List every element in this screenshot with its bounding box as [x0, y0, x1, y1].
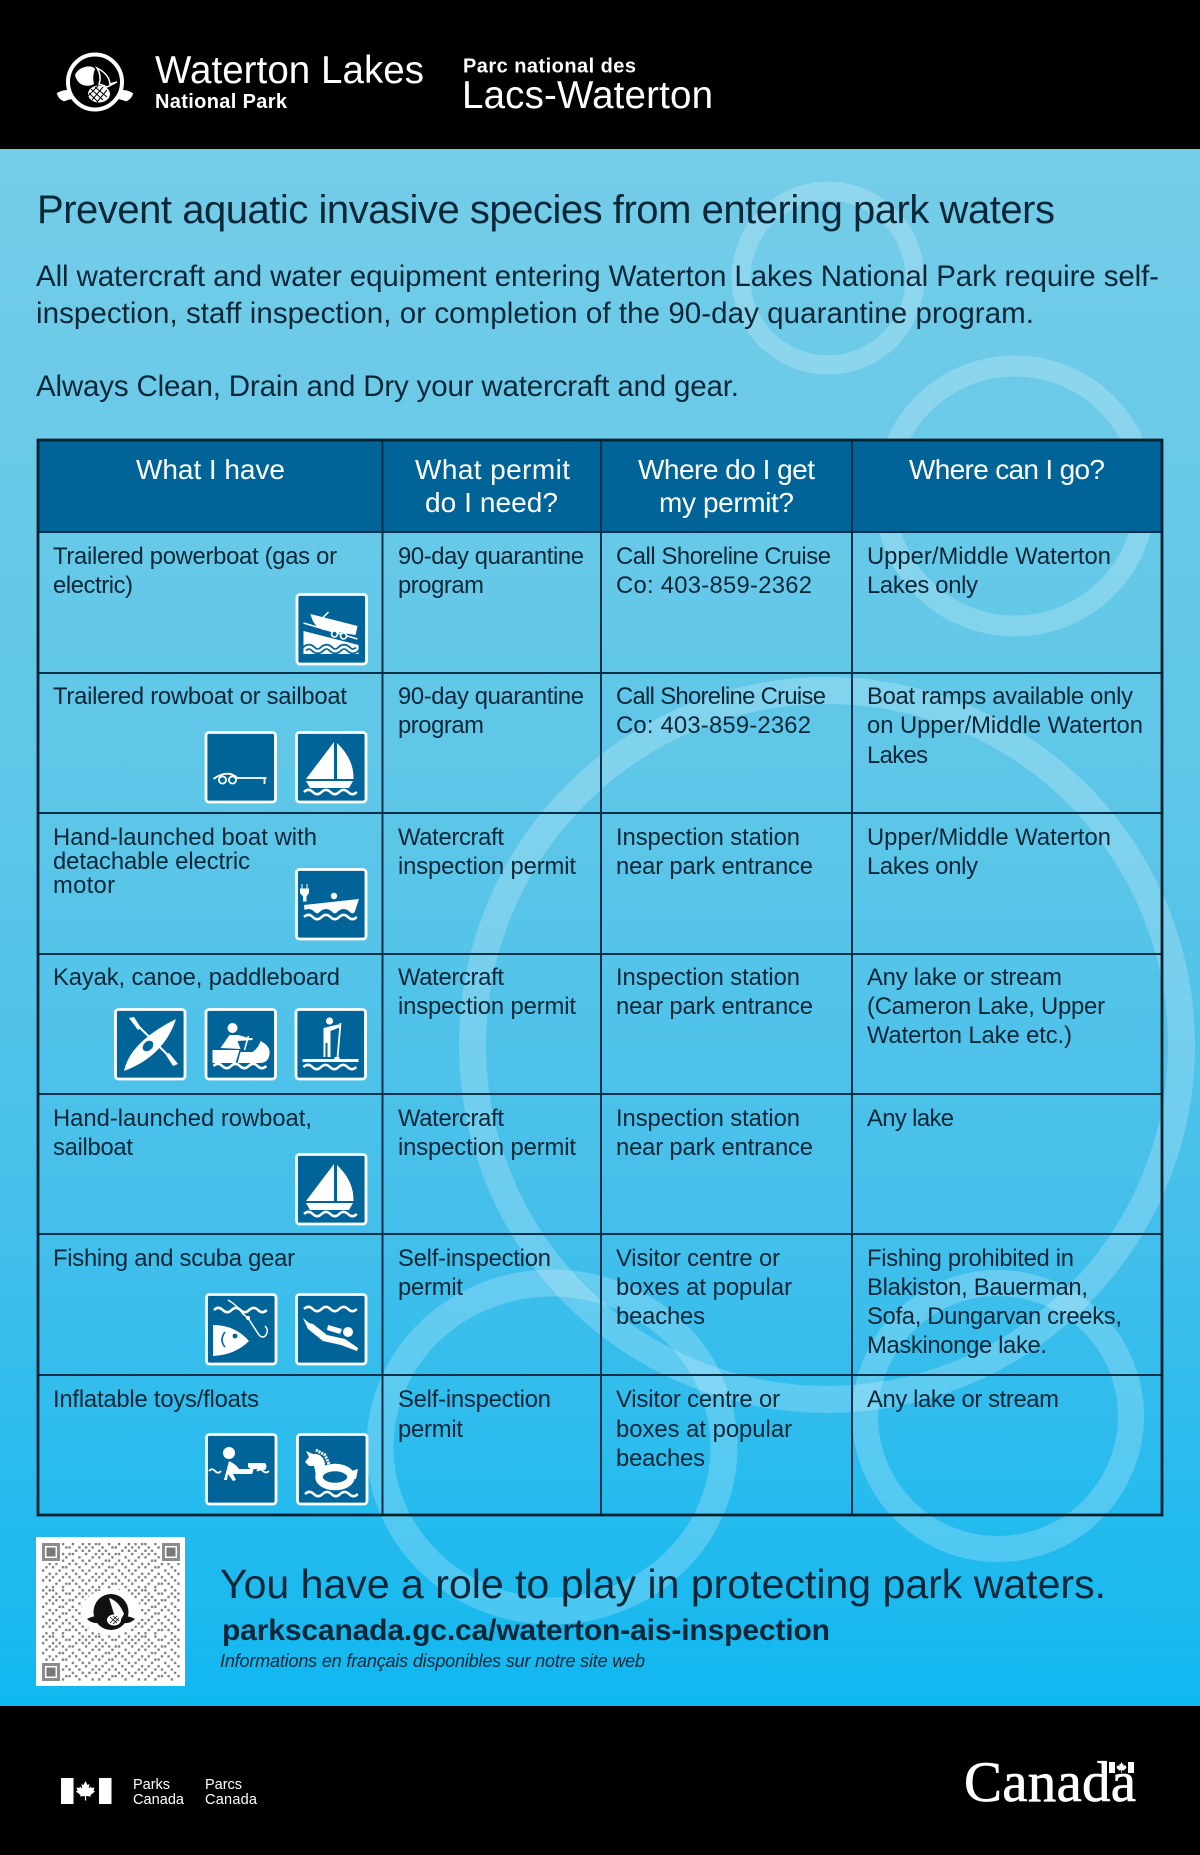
text: Any lake — [867, 1105, 954, 1132]
icon: sailboat — [296, 1154, 366, 1224]
header: what I have: What I have — [136, 454, 285, 485]
decorative water rings — [380, 191, 1182, 1611]
text: Sofa, Dungarvan creeks, — [867, 1303, 1122, 1330]
text: inspection permit — [398, 993, 576, 1020]
icon: canoe — [206, 1010, 276, 1079]
header: what permit — [415, 454, 570, 518]
icon: beaver logo — [56, 54, 134, 110]
text — [616, 683, 826, 739]
text — [867, 824, 1111, 880]
cell text: motor — [53, 872, 115, 899]
text: boxes at popular — [616, 1274, 792, 1301]
text — [398, 1386, 551, 1443]
text: beaches — [616, 1303, 705, 1330]
icon: kayak — [116, 1010, 185, 1079]
cell text: Inflatable toys/floats — [53, 1386, 259, 1413]
table — [38, 440, 1162, 1515]
park name french: Parc national des — [463, 56, 636, 78]
icon: flag over final a — [1109, 1762, 1134, 1773]
row: fishing and scuba gear — [53, 1245, 1122, 1364]
parks canada wordmark: Parks — [133, 1777, 170, 1793]
text: Inspection station — [616, 964, 800, 991]
text: Lakes only — [867, 853, 978, 880]
call to action: You have a role to play in protecting park waters. — [220, 1561, 1106, 1607]
text — [867, 1245, 1122, 1359]
text: Self-inspection — [398, 1386, 551, 1413]
header: what permit: do I need? — [425, 487, 558, 518]
table header row — [38, 440, 1162, 532]
parks canada wordmark: Canada — [133, 1792, 185, 1808]
french note: Informations en français disponibles sur notre site web — [220, 1651, 645, 1671]
text: permit — [398, 1416, 463, 1443]
cell text — [53, 543, 337, 599]
text: Inspection station — [616, 1105, 800, 1132]
text: Call Shoreline Cruise — [616, 683, 826, 710]
row: kayak canoe paddleboard — [53, 964, 1105, 1079]
park name english: National Park — [155, 91, 288, 113]
text: near park entrance — [616, 853, 813, 880]
row: trailered rowboat or sailboat — [53, 683, 1143, 802]
text: 90-day quarantine — [398, 683, 584, 710]
text: on Upper/Middle Waterton — [867, 712, 1143, 739]
park name french — [462, 56, 713, 117]
text: Lakes only — [867, 572, 978, 599]
footer band — [0, 1706, 1200, 1855]
text: Upper/Middle Waterton — [867, 824, 1111, 851]
cell text: sailboat — [53, 1134, 133, 1161]
intro text: All watercraft and water equipment entering Waterton Lakes National Park require self- — [36, 260, 1159, 293]
header: where do I get: my permit? — [659, 487, 794, 518]
text: Co: 403-859-2362 — [616, 712, 811, 739]
parcs canada wordmark — [205, 1777, 258, 1808]
cell text: Kayak, canoe, paddleboard — [53, 964, 340, 991]
text: Visitor centre or — [616, 1245, 780, 1272]
text — [867, 964, 1105, 1049]
text — [616, 1105, 813, 1161]
icon: QR beaver logo — [87, 1594, 135, 1630]
text — [398, 824, 576, 880]
text — [867, 543, 1111, 599]
text: Upper/Middle Waterton — [867, 543, 1111, 570]
text: beaches — [616, 1445, 705, 1472]
QR code — [36, 1537, 185, 1686]
icon: person on float — [206, 1434, 276, 1504]
cell text: Hand-launched boat with — [53, 824, 317, 851]
icon: electric motor boat — [296, 870, 366, 939]
text: Self-inspection — [398, 1245, 551, 1272]
text — [616, 824, 813, 880]
text: Watercraft — [398, 824, 504, 851]
text: program — [398, 712, 484, 739]
header: what permit: What permit — [415, 454, 570, 485]
text: inspection permit — [398, 1134, 576, 1161]
header: where can I go: Where can I go? — [909, 454, 1105, 485]
text: (Cameron Lake, Upper — [867, 993, 1105, 1020]
icon: trailer — [206, 732, 276, 802]
park name english — [155, 49, 424, 113]
cell text: Hand-launched rowboat, — [53, 1105, 312, 1132]
text — [398, 683, 584, 739]
text: Maskinonge lake. — [867, 1332, 1047, 1359]
text: Co: 403-859-2362 — [616, 572, 812, 599]
text: Waterton Lake etc.) — [867, 1022, 1072, 1049]
text — [398, 1105, 576, 1161]
icon: scuba diver — [296, 1294, 366, 1364]
text: Fishing prohibited in — [867, 1245, 1074, 1272]
text — [398, 543, 584, 599]
text — [398, 964, 576, 1020]
text — [616, 1386, 792, 1472]
title: Prevent aquatic invasive species from entering park waters — [37, 188, 1055, 232]
cell text: Fishing and scuba gear — [53, 1245, 295, 1272]
text: near park entrance — [616, 1134, 813, 1161]
text: Watercraft — [398, 964, 504, 991]
icon: fishing — [206, 1294, 276, 1364]
park name french: Lacs-Waterton — [462, 74, 713, 117]
icon: unicorn float — [298, 1434, 367, 1504]
row: hand-launched boat with motor — [53, 824, 1111, 939]
text: permit — [398, 1274, 463, 1301]
text — [616, 964, 813, 1020]
text — [867, 683, 1143, 769]
icon: sailboat — [296, 732, 366, 802]
intro text: inspection, staff inspection, or completion of the 90-day quarantine program. — [36, 297, 1034, 330]
text: Call Shoreline Cruise — [616, 543, 831, 570]
text: Inspection station — [616, 824, 800, 851]
text: inspection permit — [398, 853, 576, 880]
text — [398, 1245, 551, 1301]
text — [616, 1245, 792, 1330]
cell text: Trailered rowboat or sailboat — [53, 683, 347, 710]
header: where do I get — [638, 454, 815, 518]
header band — [0, 0, 1200, 149]
icon: Canadian flag — [61, 1778, 112, 1804]
cell text: Trailered powerboat (gas or — [53, 543, 337, 570]
row: hand-launched rowboat sailboat — [53, 1105, 954, 1224]
parks canada wordmark — [133, 1777, 185, 1808]
text: program — [398, 572, 484, 599]
park name english: Waterton Lakes — [155, 49, 424, 92]
text: 90-day quarantine — [398, 543, 584, 570]
text — [616, 543, 831, 599]
text: Visitor centre or — [616, 1386, 780, 1413]
url: parkscanada.gc.ca/waterton-ais-inspection — [222, 1614, 830, 1647]
row: inflatable toys — [53, 1386, 1059, 1504]
text: Boat ramps available only — [867, 683, 1133, 710]
cell text: detachable electric — [53, 848, 250, 875]
row: trailered powerboat — [53, 543, 1111, 664]
text: Any lake or stream — [867, 1386, 1059, 1413]
cell text: electric) — [53, 572, 133, 599]
text: Blakiston, Bauerman, — [867, 1274, 1088, 1301]
text: boxes at popular — [616, 1416, 792, 1443]
text: Lakes — [867, 742, 928, 769]
parcs canada wordmark: Parcs — [205, 1777, 242, 1793]
cell text — [53, 824, 317, 899]
text: near park entrance — [616, 993, 813, 1020]
call to action — [220, 1561, 1106, 1671]
parcs canada wordmark: Canada — [205, 1792, 258, 1808]
header: where do I get: Where do I get — [638, 454, 815, 485]
text: Any lake or stream — [867, 964, 1062, 991]
icon: paddleboard — [296, 1010, 366, 1079]
intro text: Always Clean, Drain and Dry your watercraft and gear. — [36, 370, 739, 403]
text: Watercraft — [398, 1105, 504, 1132]
intro text — [36, 260, 1159, 403]
cell text — [53, 1105, 312, 1161]
canada wordmark: Canada — [964, 1751, 1136, 1814]
icon: boat on ramp — [297, 594, 366, 664]
